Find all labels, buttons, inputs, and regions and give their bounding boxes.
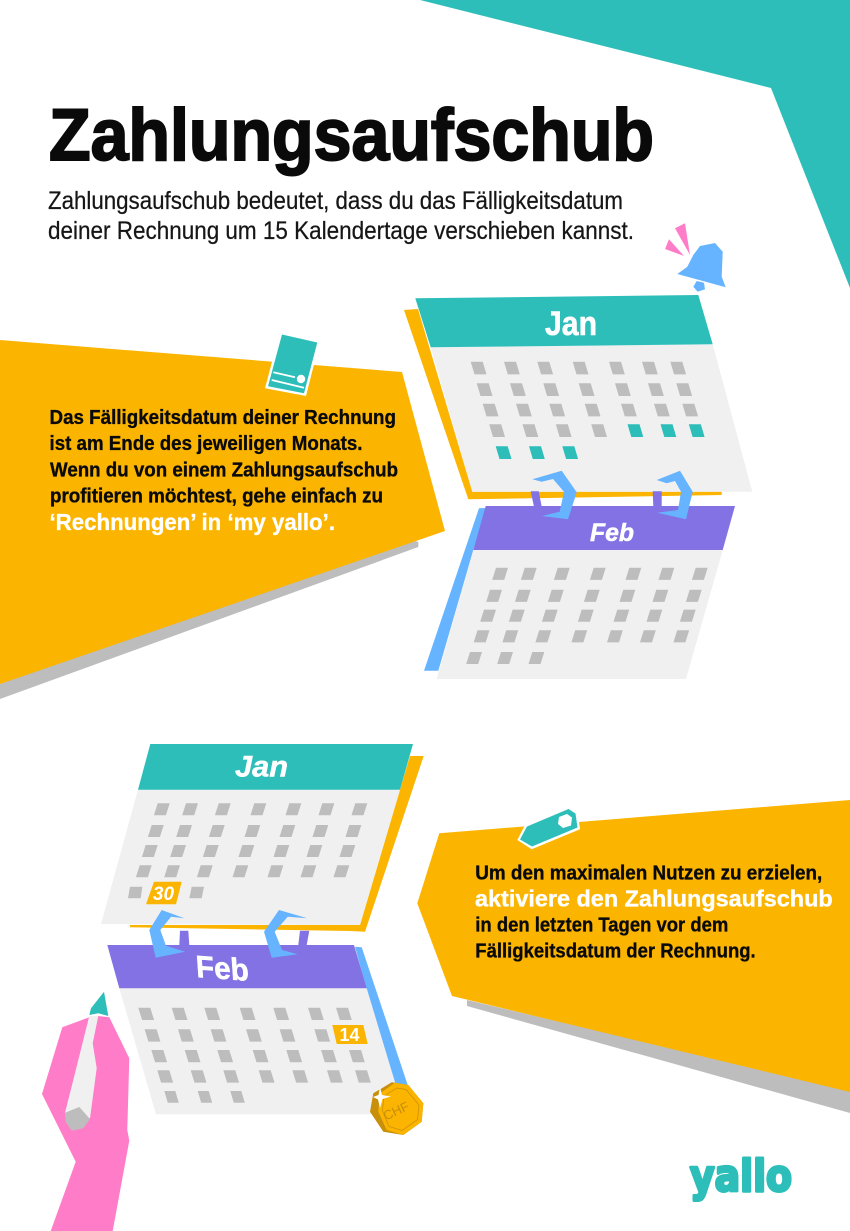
calendar: January top: Jan <box>545 305 597 343</box>
text block: due date explanation: profitieren möchtest, gehe einfach zu <box>50 484 383 508</box>
illustration: hand with pen <box>42 992 129 1231</box>
text block: due date explanation <box>50 406 398 535</box>
text block: due date explanation: ‘Rechnungen’ in ‘my yallo’. <box>50 509 335 535</box>
calendar rings: bottom pair <box>149 910 309 958</box>
calendar: February bottom: Feb <box>195 949 250 988</box>
date marker: 30: 30 <box>153 884 174 905</box>
date marker: 14 <box>332 1025 368 1045</box>
teal corner shape <box>420 0 850 288</box>
icon: CHF coin: CHF <box>381 1098 411 1123</box>
icon: CHF coin <box>370 1082 423 1135</box>
calendar: January bottom <box>101 744 424 932</box>
icon: price tag <box>517 807 580 849</box>
calendar: February top: Feb <box>590 519 634 547</box>
date marker: 30 <box>146 882 182 905</box>
date marker: 14: 14 <box>339 1025 360 1045</box>
subtitle: deiner Rechnung um 15 Kalendertage verschieben kannst. <box>48 217 634 245</box>
logo: yallo: yallo <box>690 1151 792 1202</box>
subtitle <box>48 187 634 245</box>
text block: due date explanation: ist am Ende des jeweiligen Monats. <box>50 432 362 455</box>
text block: activation advice <box>475 861 833 963</box>
calendar: February bottom <box>107 945 408 1114</box>
text block: activation advice: Um den maximalen Nutzen zu erzielen, <box>475 861 822 884</box>
panel: invoice due date <box>0 332 445 699</box>
panel: maximum benefit <box>417 800 850 1113</box>
calendar rings: top pair <box>531 471 693 519</box>
text block: due date explanation: Wenn du von einem Zahlungsaufschub <box>50 458 398 482</box>
text block: due date explanation: Das Fälligkeitsdatum deiner Rechnung <box>50 406 396 429</box>
calendar: January top <box>404 295 752 499</box>
title: Zahlungsaufschub <box>49 95 654 176</box>
calendar: January bottom: Jan <box>235 750 288 784</box>
text block: activation advice: aktiviere den Zahlungsaufschub <box>475 886 833 912</box>
text block: activation advice: in den letzten Tagen vor dem <box>475 914 728 937</box>
icon: bell <box>665 223 726 292</box>
icon: invoice document <box>265 332 320 396</box>
text block: activation advice: Fälligkeitsdatum der Rechnung. <box>475 940 756 963</box>
subtitle: Zahlungsaufschub bedeutet, dass du das Fälligkeitsdatum <box>48 187 623 215</box>
calendar: February top <box>424 506 735 679</box>
